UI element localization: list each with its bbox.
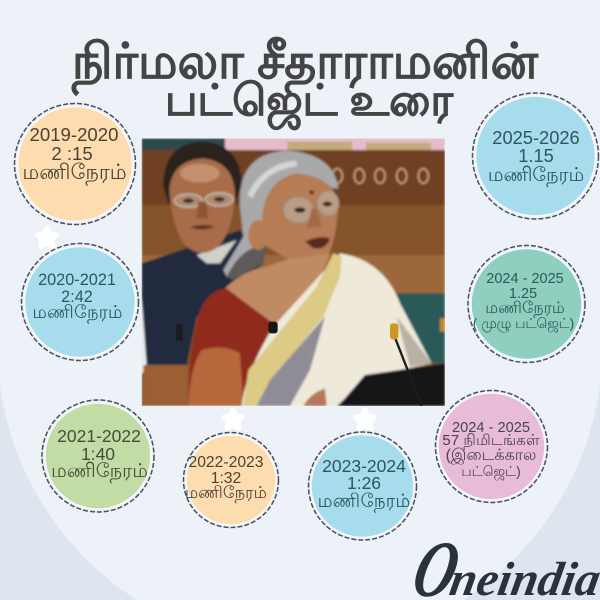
badge: 2019-2020 — [14, 104, 136, 224]
title: நிர்மலா சீதாராமனின் — [72, 35, 538, 95]
badge: 2024-2025 interim budget: பட்ஜெட்) — [461, 463, 521, 481]
badge: 2022-2023: மணிநேரம் — [185, 484, 267, 502]
badge: 2024-2025 full budget: 2024 - 2025 — [486, 271, 564, 287]
badge: 2025-2026: 1.15 — [518, 145, 554, 166]
badge: 2024-2025 interim budget: 57 நிமிடங்கள் — [442, 432, 540, 449]
badge: 2025-2026: 2025-2026 — [492, 127, 580, 148]
badge: 2024-2025 full budget: 1.25 — [509, 286, 537, 302]
photo: finance minister speaking in parliament — [142, 138, 445, 406]
badge: 2024-2025 interim budget: (இடைக்கால — [446, 447, 536, 465]
badge: 2019-2020: 2 :15 — [51, 143, 93, 164]
badge: 2019-2020: 2019-2020 — [30, 124, 118, 145]
star: centre — [224, 410, 242, 428]
title: பட்ஜெட் உரை — [165, 77, 454, 130]
badge: 2022-2023: 2022-2023 — [188, 454, 264, 471]
badge: 2023-2024: மணிநேரம் — [318, 490, 410, 513]
badge: 2019-2020: மணிநேரம் — [22, 161, 127, 186]
badge: 2025-2026: மணிநேரம் — [488, 164, 584, 187]
badge: 2021-2022: 2021-2022 — [57, 426, 141, 446]
badge: 2024-2025 full budget: ( முழு பட்ஜெட்) — [473, 316, 574, 333]
badge: 2022-2023: 1:32 — [211, 470, 241, 487]
badge: 2021-2022 — [42, 400, 154, 512]
badge: 2024-2025 interim budget: 2024 - 2025 — [452, 420, 530, 436]
title — [72, 35, 538, 130]
badge: 2024-2025 full budget — [468, 246, 585, 362]
badge: 2020-2021: 2020-2021 — [38, 271, 116, 289]
badge: 2025-2026 — [472, 93, 598, 219]
logo: Oneindia — [405, 530, 600, 600]
badge: 2021-2022: மணிநேரம் — [51, 460, 148, 483]
badge: 2020-2021: மணிநேரம் — [32, 302, 123, 324]
star: left — [38, 228, 56, 246]
badge: 2020-2021: 2:42 — [61, 288, 93, 306]
badge: 2024-2025 full budget: மணிநேரம் — [485, 300, 565, 317]
badge: 2022-2023 — [184, 432, 278, 528]
badge: 2023-2024: 2023-2024 — [322, 456, 406, 476]
badge: 2023-2024: 1:26 — [347, 473, 381, 493]
badge: 2024-2025 interim budget — [436, 390, 548, 502]
badge: 2021-2022: 1:40 — [81, 444, 115, 464]
star: right — [356, 410, 374, 428]
badge: 2020-2021 — [22, 244, 138, 360]
badge: 2023-2024 — [308, 432, 416, 540]
